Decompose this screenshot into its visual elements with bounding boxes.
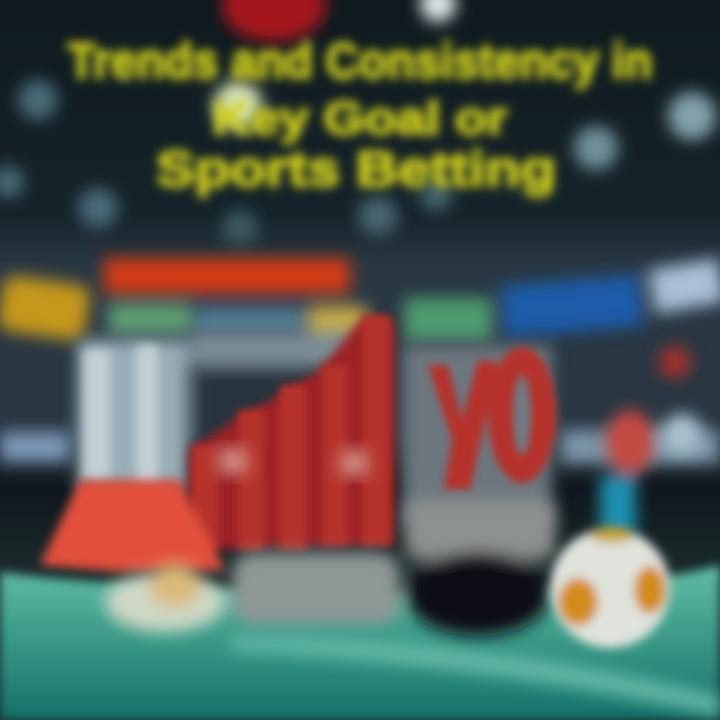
title: Key Goal or: [212, 92, 508, 144]
red characters: [428, 347, 556, 490]
red base behind bars: [190, 320, 394, 550]
title: Trends and Consistency in: [68, 33, 652, 89]
stadium lights: [0, 0, 716, 246]
white and grey panels: [78, 332, 552, 525]
red slanted base: [40, 480, 225, 572]
foreground shapes: [105, 500, 555, 636]
red bars: [192, 315, 390, 550]
red bar chart: [40, 315, 394, 572]
pitch: [0, 565, 720, 720]
right figure: [600, 346, 702, 535]
red ball at top: [222, 0, 326, 42]
pitch light band: [230, 636, 720, 716]
stand banners: [0, 258, 720, 464]
pale marks on bars: [218, 448, 368, 476]
white column stripes: [84, 345, 158, 485]
soccer ball: [550, 527, 670, 648]
title: Sports Betting: [156, 141, 556, 197]
title: [68, 33, 652, 197]
